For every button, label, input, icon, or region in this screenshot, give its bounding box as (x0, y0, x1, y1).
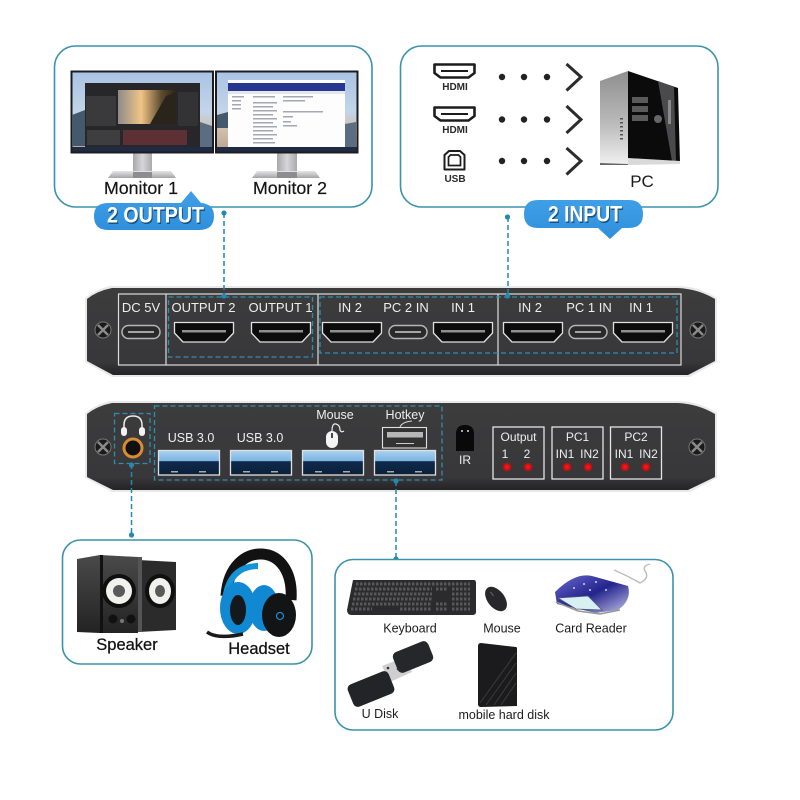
connector: audio line (129, 462, 134, 538)
icon: U disk (346, 640, 435, 708)
label: mobile hard disk: mobile hard disk (458, 708, 550, 722)
screws (95, 322, 111, 338)
LED panel: PC2: IN1 (615, 447, 634, 461)
port labels: IN 2 (338, 300, 362, 315)
icon: headphones and audio jack (121, 416, 145, 457)
LED panel: PC1: IN1 (556, 447, 575, 461)
LED panel: PC2 (610, 427, 662, 479)
screw right (689, 439, 705, 455)
icon: HDMI 2 (434, 108, 474, 136)
USB labels: Hotkey (386, 408, 425, 422)
panel: USB devices (335, 560, 673, 730)
LED panel: Output: Output (500, 430, 537, 444)
label: U Disk: U Disk (362, 707, 399, 721)
LED panel: Output: 2 (524, 447, 531, 461)
icon: USB B: USB (444, 174, 466, 185)
HDMI ports (174, 322, 672, 342)
LED panel: Output (493, 427, 544, 479)
label: PC: PC (630, 172, 654, 191)
port labels: PC 1 IN (566, 300, 612, 315)
connector: USB line (393, 478, 399, 562)
hub: rear panel (85, 401, 717, 492)
icon: card reader (555, 564, 650, 614)
screw left (95, 439, 111, 455)
LED panel: PC2: PC2 (624, 430, 648, 444)
icon: mouse (481, 583, 511, 615)
panel: outputs to monitors (54, 46, 372, 207)
icon: PC tower (600, 71, 680, 165)
connector: input line (505, 214, 510, 299)
port labels: PC 2 IN (383, 300, 429, 315)
icon: HDMI 1: HDMI (442, 82, 468, 93)
LED panel: PC1 (552, 427, 603, 479)
icon: keyboard (382, 421, 426, 448)
badge: 2 OUTPUT (94, 191, 214, 230)
port labels: IN 2 (518, 300, 542, 315)
arrows: dotted chevrons (499, 64, 581, 174)
USB labels: USB 3.0 (237, 431, 283, 445)
LED panel: Output: 1 (502, 447, 509, 461)
icon: mobile hard disk (478, 643, 517, 707)
label: Headset: Headset (228, 640, 290, 658)
LED panel: PC2: IN2 (639, 447, 658, 461)
screw right (690, 322, 706, 338)
panel: audio devices (62, 540, 312, 664)
USB ports (158, 450, 436, 475)
hub: front panel (85, 286, 717, 377)
LED panel: PC1: IN2 (580, 447, 599, 461)
icon: HDMI 1 (434, 64, 474, 93)
icon: keyboard (347, 580, 476, 615)
badge: 2 INPUT: 2 INPUT (548, 202, 622, 226)
port labels (122, 300, 653, 315)
panel: inputs from PC (400, 46, 718, 207)
monitor 2 (215, 70, 358, 178)
label: Monitor 2: Monitor 2 (253, 178, 327, 198)
connector: output line (221, 210, 227, 299)
IR sensor: IR (459, 453, 471, 467)
badge: 2 INPUT: 2 INPUT (549, 203, 623, 228)
icon: USB B (444, 151, 466, 185)
badge: 2 OUTPUT: 2 OUTPUT (107, 202, 204, 228)
label: Monitor 1: Monitor 1 (104, 178, 178, 198)
icon: headset (207, 554, 296, 637)
IR sensor (456, 425, 474, 467)
label: Speaker: Speaker (96, 636, 158, 654)
label: Keyboard: Keyboard (383, 622, 437, 636)
icon: speakers (77, 555, 176, 633)
icon: mouse (326, 424, 344, 448)
label: Mouse: Mouse (483, 622, 521, 636)
port labels: OUTPUT 1 (248, 300, 313, 315)
port labels: IN 1 (451, 300, 475, 315)
port labels: OUTPUT 2 (171, 300, 236, 315)
USB labels: USB 3.0 (168, 431, 214, 445)
LED panel: PC1: PC1 (566, 430, 589, 444)
icon: HDMI 2: HDMI (442, 125, 468, 136)
badge: 2 INPUT (524, 200, 643, 239)
port labels: DC 5V (122, 300, 160, 315)
port labels: IN 1 (629, 300, 653, 315)
badge: 2 OUTPUT: 2 OUTPUT (108, 204, 205, 229)
label: Card Reader: Card Reader (555, 622, 627, 636)
monitor 1 (70, 70, 214, 178)
USB-C ports (122, 326, 607, 338)
USB labels (168, 408, 425, 445)
USB labels: Mouse (316, 408, 354, 422)
